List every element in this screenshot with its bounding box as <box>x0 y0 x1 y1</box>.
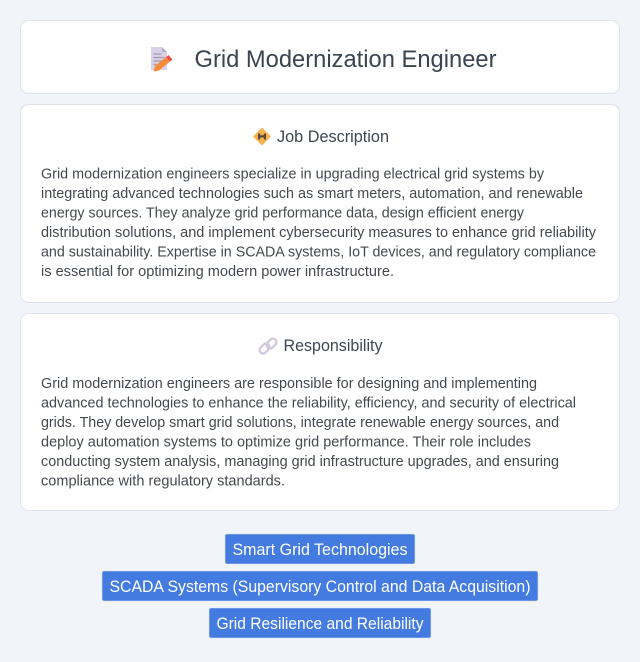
text: job description body: distribution solutions, and implement cybersecurity measures to enhance grid reliability <box>41 225 597 241</box>
text: responsibility body: advanced technologies to enhance the reliability, efficiency, and security of electrical <box>41 396 576 412</box>
icon: orange diamond <box>253 128 271 146</box>
icon: document with pencil <box>151 47 172 72</box>
text: responsibility body: grids. They develop smart grid solutions, integrate renewable energy sources, and <box>41 415 559 431</box>
icon: chain link <box>258 337 278 355</box>
title: Grid Modernization Engineer <box>194 46 496 73</box>
tag: smart grid technologies: Smart Grid Technologies <box>232 540 408 559</box>
tag: scada systems: SCADA Systems (Supervisory Control and Data Acquisition) <box>110 577 530 596</box>
text: job description body: integrating advanced technologies such as smart meters, automation, and renewable <box>41 186 583 202</box>
text: job description body: energy sources. They analyze grid performance data, design efficient energy <box>41 206 525 222</box>
text: job description body <box>41 166 597 280</box>
text: responsibility body: Grid modernization engineers are responsible for designing and implementing <box>41 376 537 392</box>
panel: title card <box>20 20 620 94</box>
text: responsibility body: conducting system analysis, managing grid infrastructure upgrades, and ensuring <box>41 454 559 470</box>
tag: grid resilience <box>209 608 431 638</box>
heading: responsibility: Responsibility <box>284 337 383 355</box>
text: job description body: Grid modernization engineers specialize in upgrading electrical grid systems by <box>41 166 545 182</box>
text: job description body: is essential for optimizing modern power infrastructure. <box>41 264 394 280</box>
text: responsibility body: deploy automation systems to optimize grid performance. Their role includes <box>41 434 531 450</box>
tag: scada systems <box>102 571 538 601</box>
tag: grid resilience: Grid Resilience and Reliability <box>216 614 424 633</box>
panel: job description <box>20 104 620 302</box>
tag: smart grid technologies <box>225 534 415 564</box>
heading: job description: Job Description <box>277 128 389 146</box>
panel: responsibility <box>20 314 620 510</box>
text: responsibility body <box>41 376 576 490</box>
text: responsibility body: compliance with regulatory standards. <box>41 474 285 490</box>
text: job description body: and sustainability. Expertise in SCADA systems, IoT devices, and regulatory compliance <box>41 244 596 260</box>
